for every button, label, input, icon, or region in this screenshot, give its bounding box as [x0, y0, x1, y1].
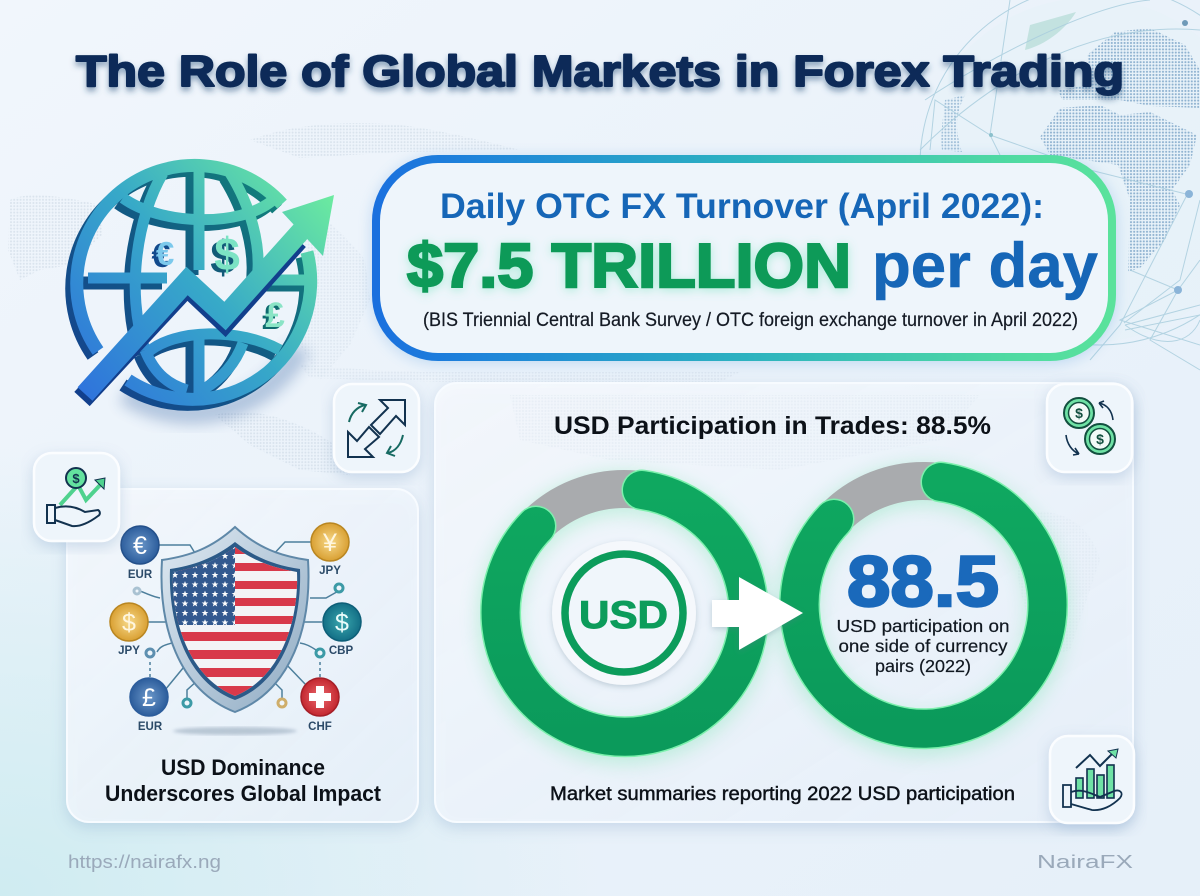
stat description: pairs (2022): [875, 656, 971, 676]
connector lines: [136, 542, 342, 702]
globe depth layer: [72, 170, 306, 404]
caption: Underscores Global Impact: [105, 781, 382, 806]
footer url: https://nairafx.ng: [68, 852, 221, 872]
icon: globe with rising arrow: £: [262, 298, 282, 337]
panel: USD dominance: [67, 489, 418, 822]
coin: pound: EUR: [138, 721, 163, 733]
coin: swiss cross: [301, 678, 339, 733]
coin: pound: £: [142, 684, 156, 712]
shield: [162, 527, 308, 712]
icon: currency exchange coins: $: [1075, 405, 1083, 421]
coin: euro: €: [133, 532, 147, 560]
stat description: one side of currency: [838, 636, 1008, 656]
icon: exchange arrows: [334, 384, 419, 472]
faint map inside panel: [510, 395, 1100, 660]
coin: dollar gold: JPY: [118, 645, 140, 657]
per day: per day: [872, 231, 1098, 301]
coin: swiss cross: CHF: [308, 721, 332, 733]
world map backdrop: [8, 123, 740, 475]
panel: USD participation: [435, 383, 1133, 822]
coin: yen: JPY: [319, 565, 341, 577]
arrow: [712, 577, 803, 650]
icon: hand with growth: $: [72, 471, 80, 486]
coin: dollar teal: CBP: [329, 645, 353, 657]
title: The Role of Global Markets in Forex Trading: [76, 47, 1124, 96]
icon: globe with rising arrow: €: [156, 235, 174, 272]
caption: USD Dominance: [161, 755, 325, 780]
icon: globe with rising arrow: £: [265, 296, 285, 335]
currency symbols: €: [152, 237, 171, 275]
footnote: Market summaries reporting 2022 USD participation: [550, 783, 1015, 805]
coin: pound: [130, 678, 168, 733]
coin: dollar gold: $: [122, 609, 136, 637]
big number: $7.5 TRILLION: [407, 232, 851, 301]
icon: globe with rising arrow: $: [214, 228, 240, 280]
globe backdrop top right: [918, 0, 1200, 370]
coin: dollar teal: $: [335, 609, 349, 637]
trend arrow: [82, 240, 298, 399]
icon: hand with growth: [34, 453, 119, 541]
icon: globe with rising arrow: [72, 165, 334, 413]
donut chart: left: [499, 489, 749, 743]
big stat: 88.5: [847, 543, 999, 622]
USD badge: [552, 541, 696, 685]
heading: Daily OTC FX Turnover (April 2022):: [440, 187, 1044, 226]
heading: USD Participation in Trades: 88.5%: [554, 412, 991, 440]
stat description: [836, 616, 1010, 676]
footer brand: NairaFX: [1037, 852, 1133, 872]
callout: daily turnover: [372, 157, 1116, 363]
icon: currency exchange coins: [1047, 384, 1132, 472]
coin: euro: EUR: [128, 569, 153, 581]
small nodes: [134, 584, 343, 707]
coin: euro: [121, 526, 159, 581]
caption: [105, 755, 382, 806]
globe face layer: [77, 165, 311, 399]
USD badge: USD: [579, 594, 668, 637]
icon: globe with rising arrow: $: [210, 231, 236, 283]
stat description: USD participation on: [836, 616, 1010, 636]
shadow under shield: [173, 727, 297, 735]
coin: dollar gold: [110, 603, 148, 657]
coin: yen: ¥: [322, 529, 337, 557]
coin: yen: [311, 523, 349, 577]
icon: currency exchange coins: $: [1096, 431, 1104, 447]
coin: dollar teal: [323, 603, 361, 657]
source: (BIS Triennial Central Bank Survey / OTC foreign exchange turnover in April 2022): [423, 310, 1078, 331]
icon: hand with bar chart: [1050, 736, 1134, 823]
donut chart: right: [798, 481, 1048, 735]
